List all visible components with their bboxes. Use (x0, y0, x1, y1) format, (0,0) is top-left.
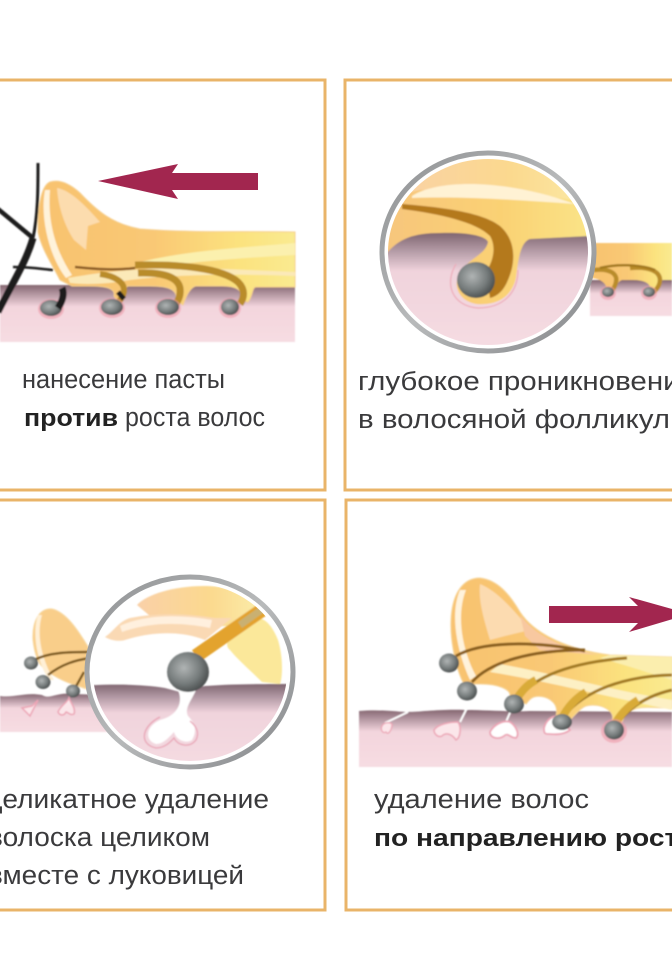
magnifier circle (80, 577, 300, 780)
extracted follicle void (148, 690, 196, 744)
follicle bulbs (439, 654, 627, 743)
illustration: paste on skin (0, 163, 295, 342)
follicle bulbs (600, 286, 657, 300)
caption: против (24, 405, 118, 432)
paste body (451, 578, 672, 726)
caption: удаление волос (374, 786, 589, 814)
follicle bulbs (38, 298, 241, 319)
caption: глубокое проникновение (358, 368, 672, 396)
arrow pointing left (98, 164, 258, 199)
caption (374, 786, 672, 852)
peach paste (137, 586, 259, 626)
follicle outline (144, 717, 198, 748)
panel: apply paste against hair growth (0, 80, 325, 490)
panel 2 frame (345, 80, 672, 490)
skin strip (0, 694, 110, 732)
pale paste band (105, 614, 232, 641)
magnified bulb (167, 652, 209, 692)
panel: gentle removal of whole hair with bulb (0, 500, 325, 910)
follicle outline (451, 264, 518, 308)
caption (22, 366, 265, 432)
hair strands (630, 268, 660, 292)
paste blob (33, 609, 90, 690)
magnified skin (388, 232, 588, 345)
extraction trails and empty follicles (381, 706, 570, 740)
yellow paste (227, 618, 282, 684)
paste strip (590, 243, 672, 294)
magnified skin (94, 683, 286, 761)
magnified bulb (457, 262, 495, 298)
magnifier circle (380, 150, 600, 360)
caption: в волосяной фолликул (358, 406, 670, 434)
hair strands (34, 652, 90, 690)
removed bulbs (24, 656, 80, 698)
skin strip (590, 280, 672, 316)
paste highlights (455, 590, 476, 680)
magnifier rim (382, 153, 594, 351)
caption: роста волос (125, 404, 265, 432)
panel 4 frame (346, 500, 672, 910)
magnifier contents (94, 585, 286, 761)
empty follicles (22, 698, 74, 716)
illustration: skin strip with paste (590, 243, 672, 316)
white highlight band (412, 184, 575, 204)
caption: нанесение пасты (22, 366, 225, 394)
illustration: small paste strip with removed hairs (0, 609, 110, 732)
paste body (38, 181, 295, 305)
hair strands in paste (75, 267, 135, 269)
magnifier rim (87, 577, 293, 767)
magnified paste (388, 189, 586, 306)
panel: deep penetration into hair follicle (345, 80, 672, 490)
caption (358, 368, 672, 434)
caption: по направлению роста (374, 825, 672, 852)
magnified hair (196, 610, 262, 656)
magnifier contents (388, 159, 588, 345)
panel 3 frame (0, 500, 325, 910)
arrow pointing right (549, 597, 672, 632)
black hairs (33, 163, 38, 238)
skin layer (0, 285, 295, 342)
paste highlights (44, 190, 72, 278)
panel: removal in direction of hair growth (346, 500, 672, 910)
skin strip (359, 710, 672, 767)
magnified hair (402, 204, 513, 298)
hair strands (456, 644, 672, 726)
panel 1 frame (0, 80, 325, 490)
caption (0, 786, 269, 890)
illustration: paste lifted with hairs (359, 578, 672, 767)
